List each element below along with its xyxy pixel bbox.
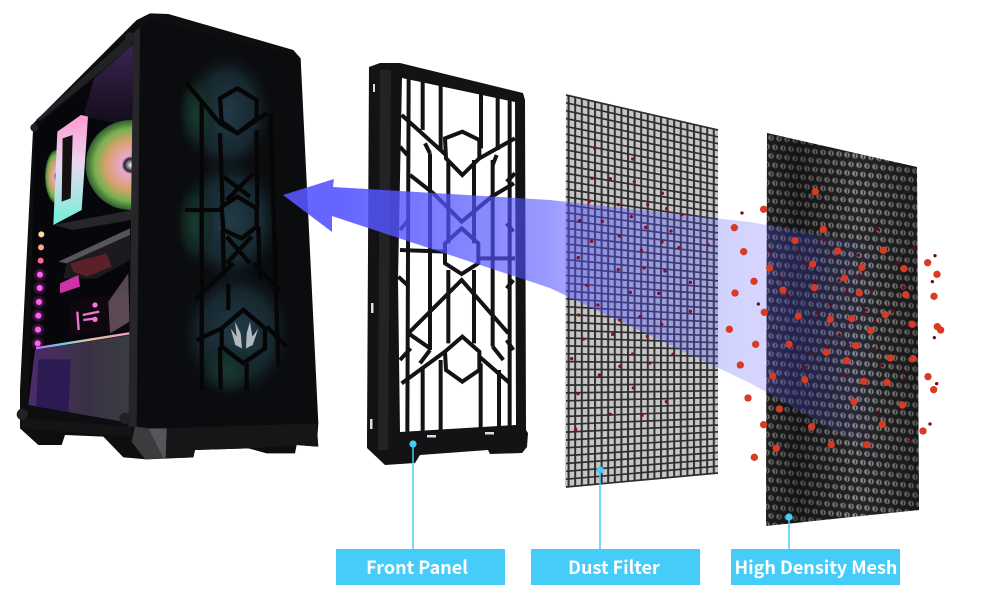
bottom hexagon xyxy=(445,337,479,382)
fan glow green middle xyxy=(179,191,211,258)
top hexagon xyxy=(445,132,479,175)
fan glow middle xyxy=(194,166,272,274)
window interior xyxy=(28,79,94,398)
base lighter wedge xyxy=(148,428,167,458)
panel frame xyxy=(367,63,528,465)
shelf xyxy=(53,210,132,230)
label text: Dust Filter xyxy=(568,554,660,580)
crystal fittings xyxy=(108,273,129,333)
red card accent xyxy=(70,253,112,277)
cooler fan right xyxy=(86,120,132,210)
label text: Front Panel xyxy=(366,554,468,580)
mesh holes xyxy=(766,133,919,526)
case base xyxy=(20,418,318,459)
leader line xyxy=(409,440,417,549)
airflow arrow xyxy=(283,179,885,470)
base dark strip xyxy=(166,423,318,458)
vertical bars xyxy=(407,78,510,432)
fan glow green bottom xyxy=(204,348,246,390)
front panel part xyxy=(367,63,528,465)
dust filter xyxy=(565,95,718,487)
rgb shroud line xyxy=(36,333,129,348)
base under window xyxy=(20,418,132,437)
PC case xyxy=(17,13,318,459)
diagonal lattice xyxy=(398,115,515,383)
high density mesh xyxy=(766,133,919,526)
logo wings xyxy=(231,322,242,348)
AIO black screen xyxy=(62,135,73,202)
BitFenix logo xyxy=(231,322,258,348)
leader line xyxy=(596,466,604,549)
lattice seen through mesh xyxy=(185,83,287,390)
upper purple glass xyxy=(83,45,133,127)
rear fan left xyxy=(45,150,56,203)
LED glow xyxy=(30,267,47,351)
fan glow group xyxy=(180,60,286,392)
label: High Density Mesh xyxy=(731,513,900,585)
middle hexagon xyxy=(445,228,478,274)
plate logo xyxy=(77,312,99,330)
label box xyxy=(531,549,700,585)
center channel bars xyxy=(430,153,493,350)
LED strip xyxy=(30,231,47,351)
label box xyxy=(731,549,900,585)
fan glow green top xyxy=(181,84,214,143)
pink LEDs on plate xyxy=(92,302,98,322)
filter base with vertical threads xyxy=(565,95,718,487)
basement shroud xyxy=(28,335,129,425)
panel lattice xyxy=(398,78,515,432)
graphics card plate xyxy=(68,293,129,335)
graphics card rail xyxy=(58,228,130,263)
base left wedge xyxy=(132,427,163,459)
side window xyxy=(28,46,133,422)
label box xyxy=(336,549,505,585)
dust particles at filter xyxy=(570,147,710,431)
fan glow bottom xyxy=(188,277,286,388)
label: Dust Filter xyxy=(531,466,700,585)
leader line xyxy=(785,513,793,549)
AIO radiator block xyxy=(53,115,88,225)
small dust particles at mesh xyxy=(740,211,938,443)
filter horizontal threads xyxy=(566,95,718,487)
logo wings right xyxy=(246,322,258,348)
case pillar xyxy=(128,26,141,427)
thumb screws xyxy=(17,32,135,424)
mounting clips xyxy=(370,84,494,438)
label: Front Panel xyxy=(336,440,505,585)
front mesh panel xyxy=(137,20,317,428)
frame side shading xyxy=(378,70,391,450)
front fans and lattice xyxy=(180,60,288,392)
panel openings xyxy=(398,78,516,432)
fan glow top xyxy=(196,60,266,165)
label text: High Density Mesh xyxy=(735,554,897,580)
LED lamps xyxy=(35,231,44,346)
case silhouette xyxy=(20,13,318,459)
mesh shading xyxy=(766,133,919,526)
large dust particles at mesh xyxy=(726,188,944,461)
basement square xyxy=(36,359,71,416)
top glass of side window xyxy=(36,37,133,121)
graphics card body xyxy=(63,235,130,278)
magenta light xyxy=(60,275,80,293)
